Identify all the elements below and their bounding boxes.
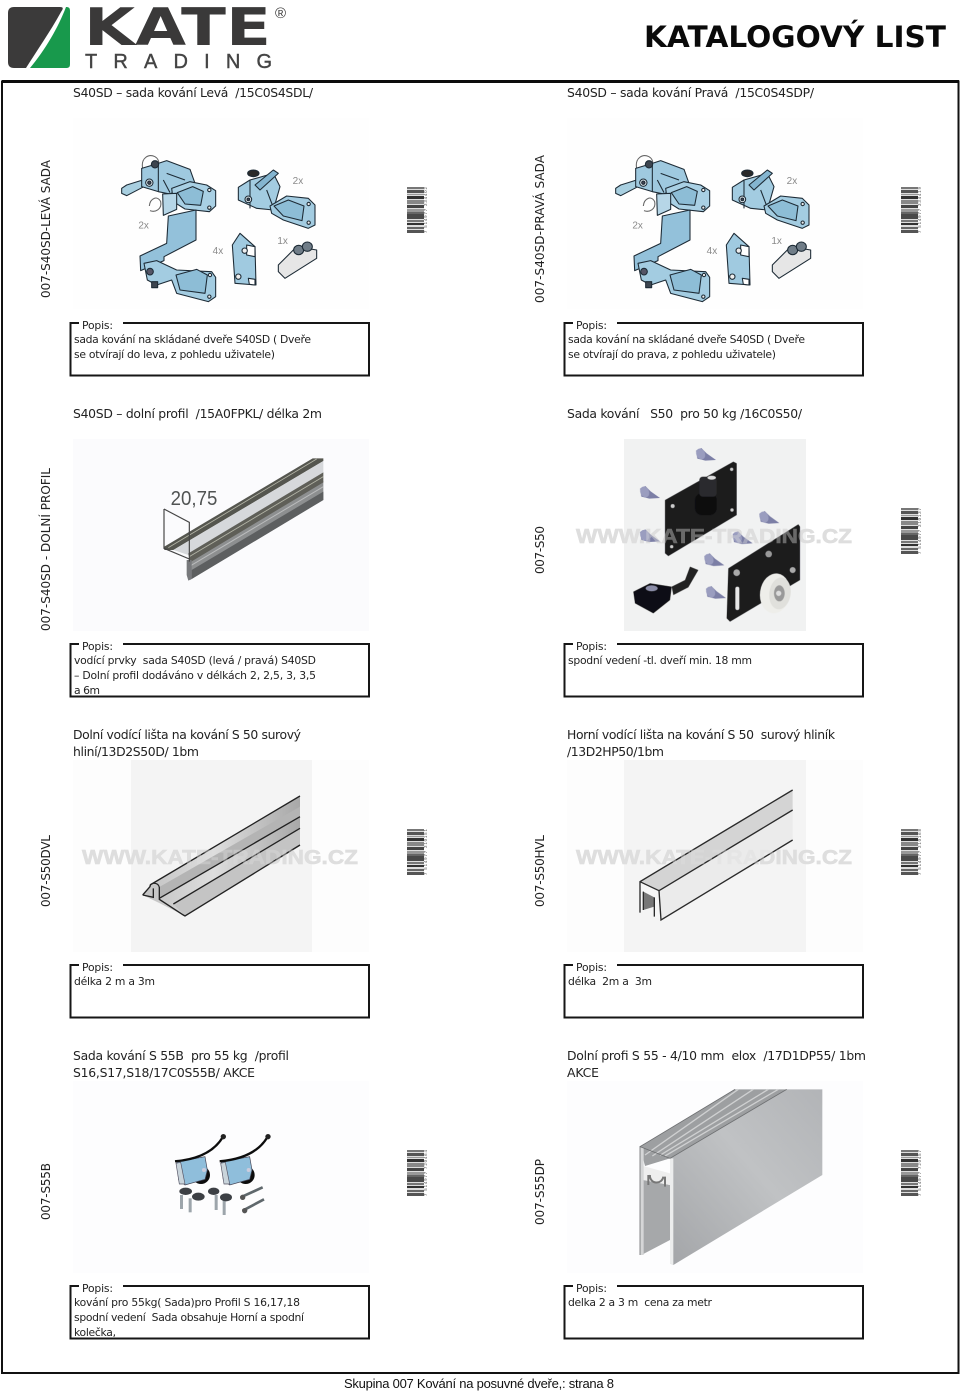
description box [564,961,863,1018]
heading: hliní/13D2S50D/ 1bm [73,744,199,759]
heading [73,1048,289,1080]
description box [70,319,369,376]
footer: Skupina 007 Kování na posuvné dveře,: strana 8 [344,1376,614,1391]
description box [70,1282,369,1339]
product image: hardware set: 1x [771,236,782,247]
product image: lower rail [73,760,369,952]
description box: Popis: [576,319,607,332]
heading: S16,S17,S18/17C0S55B/ AKCE [73,1065,255,1080]
description box [564,319,863,376]
description box [564,1282,863,1338]
logo: Kate Trading [8,0,286,73]
heading: Sada kování S 55B pro 55 kg /profil [73,1048,289,1063]
barcode [407,1150,428,1196]
product image: hardware set [73,118,369,309]
product code: 007-S40SD-LEVÁ SADA [38,159,53,298]
barcode: 7 514977 334402 [423,187,428,233]
description box [564,640,863,696]
description box: Popis: [82,1282,113,1295]
product image: S50 roller set [576,439,852,631]
product image: hardware set: 4x [213,246,223,257]
description box: se otvírají do prava, z pohledu uživatele) [568,348,776,361]
description box: délka 2m a 3m [568,975,652,988]
description box: Popis: [576,640,607,653]
barcode [901,1150,922,1196]
heading [567,1048,866,1080]
heading: Dolní vodící lišta na kování S 50 surový [73,727,301,742]
product code: 007-S40SD-PRAVÁ SADA [532,154,547,303]
barcode [901,187,922,233]
panel: S50 upper guide rail [533,727,922,1018]
description box: vodící prvky sada S40SD (levá / pravá) S40SD [74,654,316,667]
barcode [901,829,922,875]
heading: AKCE [567,1065,599,1080]
panel: S50 hardware set [533,406,922,696]
description box: sada kování na skládané dveře S40SD ( Dveře [568,333,805,346]
heading: S40SD – sada kování Levá /15C0S4SDL/ [73,85,314,100]
frame top rule [2,80,959,83]
heading: Dolní profi S 55 - 4/10 mm elox /17D1DP55/ 1bm [567,1048,866,1063]
heading: /13D2HP50/1bm [567,744,664,759]
description box: Popis: [576,1282,607,1295]
title: KATALOGOVÝ LIST [644,20,946,54]
panel: S40SD bottom profile [38,406,369,697]
product code: 007-S55DP [533,1159,547,1225]
product image: profile with dimension: 20,75 [171,487,217,510]
barcode [407,829,428,875]
watermark: WWW.KATE-TRADING.CZ [82,847,358,869]
description box [70,961,369,1018]
heading [567,727,836,759]
heading: Horní vodící lišta na kování S 50 surový hliník [567,727,836,742]
product code: 007-S50 [533,526,547,574]
description box: kolečka, [74,1326,116,1339]
barcode: 7 514977 310168 [917,829,922,875]
description box: sada kování na skládané dveře S40SD ( Dveře [74,333,311,346]
product image: profile with dimension [73,439,369,631]
product image: hardware set [567,118,863,309]
watermark overlay: WWW.KATE-TRADING.CZ [576,847,852,869]
logo mark dark [8,7,63,68]
description box: délka 2 m a 3m [74,975,155,988]
heading: Sada kování S50 pro 50 kg /16C0S50/ [567,406,803,421]
product image: hardware set: 2x [138,220,149,231]
logo mark green [30,7,70,68]
watermark: WWW.KATE-TRADING.CZ [576,847,852,869]
registered mark: ® [275,5,286,22]
description box: Popis: [576,961,607,974]
panel: S40SD left set [38,85,428,376]
barcode: 7 514977 310137 [917,508,922,554]
panel: S50 lower guide rail [39,727,428,1018]
product code: 007-S40SD - DOLNÍ PROFIL [38,468,53,631]
panel: S55 lower profile [533,1048,922,1338]
barcode: 7 514977 720464 [423,1150,428,1196]
barcode: 7 514977 334419 [917,187,922,233]
description box: spodní vedení Sada obsahuje Horní a spodní [74,1311,305,1324]
description box: Popis: [82,961,113,974]
watermark overlay: WWW.KATE-TRADING.CZ [82,847,358,869]
logo subline: TRADING [85,51,272,73]
description box: – Dolní profil dodáváno v délkách 2, 2,5, 3, 3,5 [74,669,316,682]
description box: kování pro 55kg( Sada)pro Profil S 16,17,18 [74,1296,300,1309]
description box: delka 2 a 3 m cena za metr [568,1296,713,1309]
description box: Popis: [82,319,113,332]
description box: se otvírají do leva, z pohledu uživatele) [74,348,275,361]
description box [70,640,369,697]
barcode [901,508,922,554]
watermark overlay: WWW.KATE-TRADING.CZ [576,526,852,548]
product image: hardware set: 2x [632,220,643,231]
description box: Popis: [82,640,113,653]
product image: upper rail [567,760,863,952]
product image: hardware set: 2x [293,176,303,187]
product image: hardware set: 4x [707,246,717,257]
product image: hardware set: 1x [277,236,288,247]
product image: hardware set: 2x [787,176,797,187]
heading: S40SD – dolní profil /15A0FPKL/ délka 2m [73,406,322,421]
watermark: WWW.KATE-TRADING.CZ [576,526,852,548]
product code: 007-S55B [39,1163,53,1220]
product image: S55 profile [567,1081,863,1273]
panel: S55B hardware set [39,1048,428,1339]
product code: 007-S50HVL [533,835,547,907]
description box: spodní vedení -tl. dveří min. 18 mm [568,654,752,667]
product image: S55B rollers [73,1081,369,1273]
heading: S40SD – sada kování Pravá /15C0S4SDP/ [567,85,815,100]
barcode [407,187,428,233]
barcode: 7 514977 310151 [423,829,428,875]
barcode: 7 514977 720457 [917,1150,922,1196]
panel: S40SD right set [532,85,922,376]
heading [73,727,301,759]
description box: a 6m [74,684,100,697]
product code: 007-S50DVL [39,835,53,907]
